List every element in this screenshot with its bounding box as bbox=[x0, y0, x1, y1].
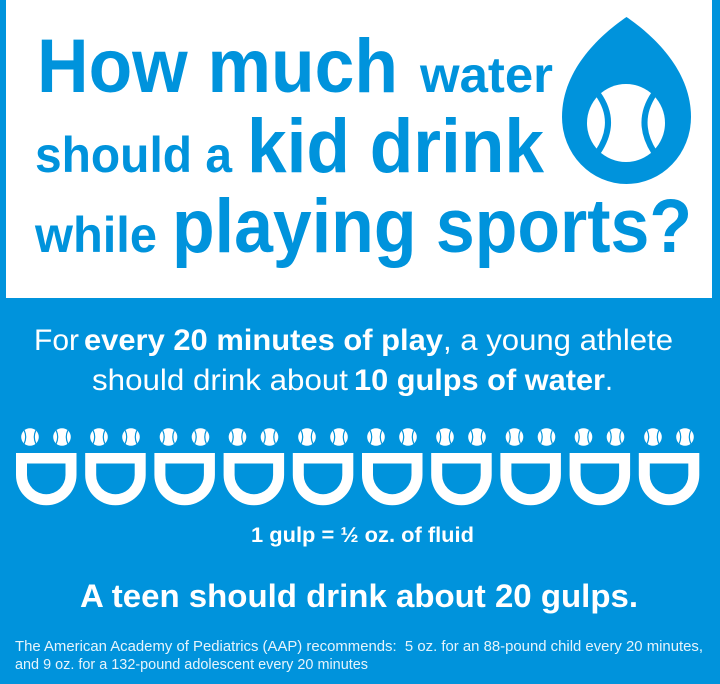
title line 2: should a bbox=[35, 127, 233, 183]
intro text: every 20 minutes of play bbox=[84, 324, 443, 357]
gulp icons: cups and balls bbox=[16, 428, 699, 505]
intro text: should drink about bbox=[92, 364, 349, 397]
title line 3: while bbox=[34, 207, 157, 263]
footnote: The American Academy of Pediatrics (AAP) recommends: 5 oz. for an 88-pound child every 20 minutes, bbox=[15, 639, 703, 655]
title panel bbox=[6, 0, 712, 298]
intro text: For bbox=[34, 324, 79, 357]
icon: water drop with ball bbox=[562, 17, 691, 184]
title line 1: How much bbox=[37, 24, 398, 109]
teen statement: A teen should drink about 20 gulps. bbox=[80, 578, 638, 614]
intro text: 10 gulps of water bbox=[354, 364, 605, 397]
title line 1: water bbox=[419, 47, 553, 103]
footnote bbox=[15, 639, 703, 673]
gulp definition: 1 gulp = ½ oz. of fluid bbox=[251, 524, 474, 547]
footnote: and 9 oz. for a 132-pound adolescent every 20 minutes bbox=[15, 657, 368, 673]
title line 2 bbox=[35, 104, 545, 189]
intro text: , a young athlete bbox=[443, 324, 673, 357]
intro text: . bbox=[605, 364, 613, 397]
title line 2: kid drink bbox=[247, 104, 545, 189]
intro text bbox=[34, 324, 673, 397]
